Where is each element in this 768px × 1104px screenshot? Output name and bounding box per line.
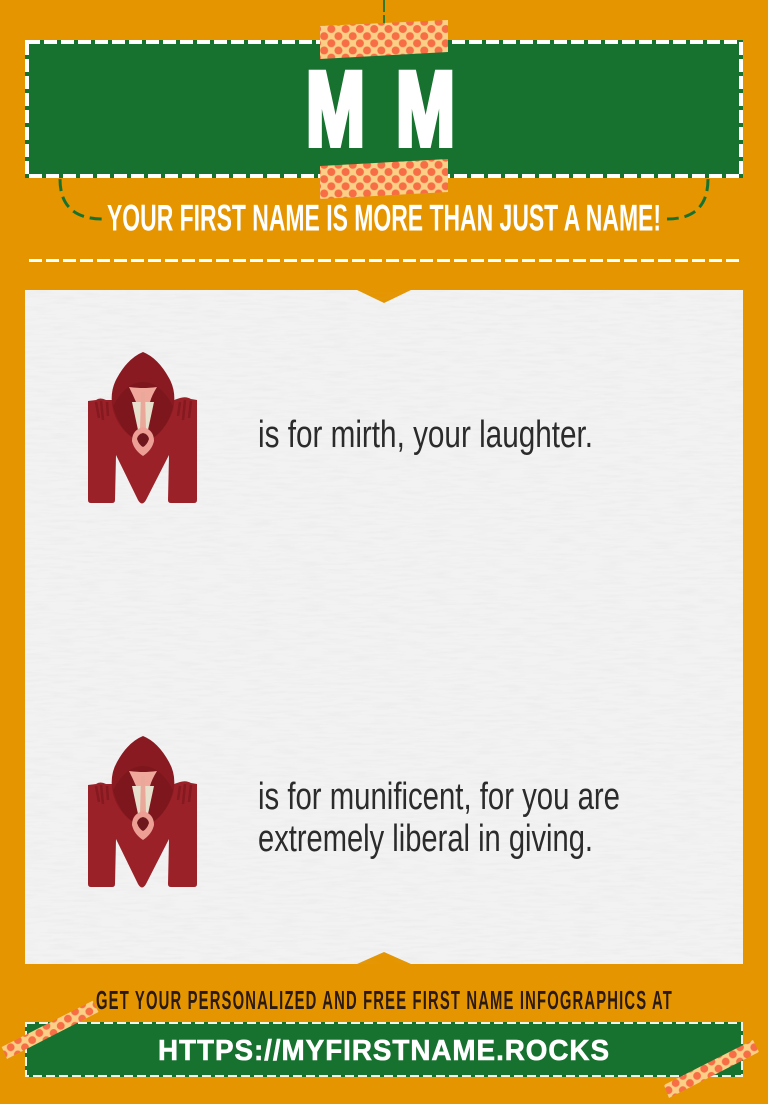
row 2: text: extremely liberal in giving. xyxy=(258,818,593,860)
row 1: text: is for mirth, your laughter. xyxy=(258,414,593,456)
connector left xyxy=(60,179,103,219)
name letters: M xyxy=(306,51,365,168)
row 2: icon M xyxy=(88,736,197,888)
name letters xyxy=(306,51,455,168)
row 1: icon M xyxy=(88,352,197,504)
paper panel xyxy=(25,290,743,964)
title banner xyxy=(25,20,743,199)
tape: bottom xyxy=(320,159,448,199)
footer url banner xyxy=(25,1022,743,1077)
hanging string xyxy=(383,0,385,24)
tape: footer left xyxy=(2,1001,99,1059)
row 2: text xyxy=(258,776,620,860)
footer url banner: HTTPS://MYFIRSTNAME.ROCKS xyxy=(158,1035,610,1067)
tape: top xyxy=(320,20,448,59)
name letters: M xyxy=(396,51,455,168)
dashed divider xyxy=(29,259,739,262)
tape: footer right xyxy=(664,1040,759,1098)
row 2: text: is for munificent, for you are xyxy=(258,776,620,818)
connector right xyxy=(667,179,708,219)
